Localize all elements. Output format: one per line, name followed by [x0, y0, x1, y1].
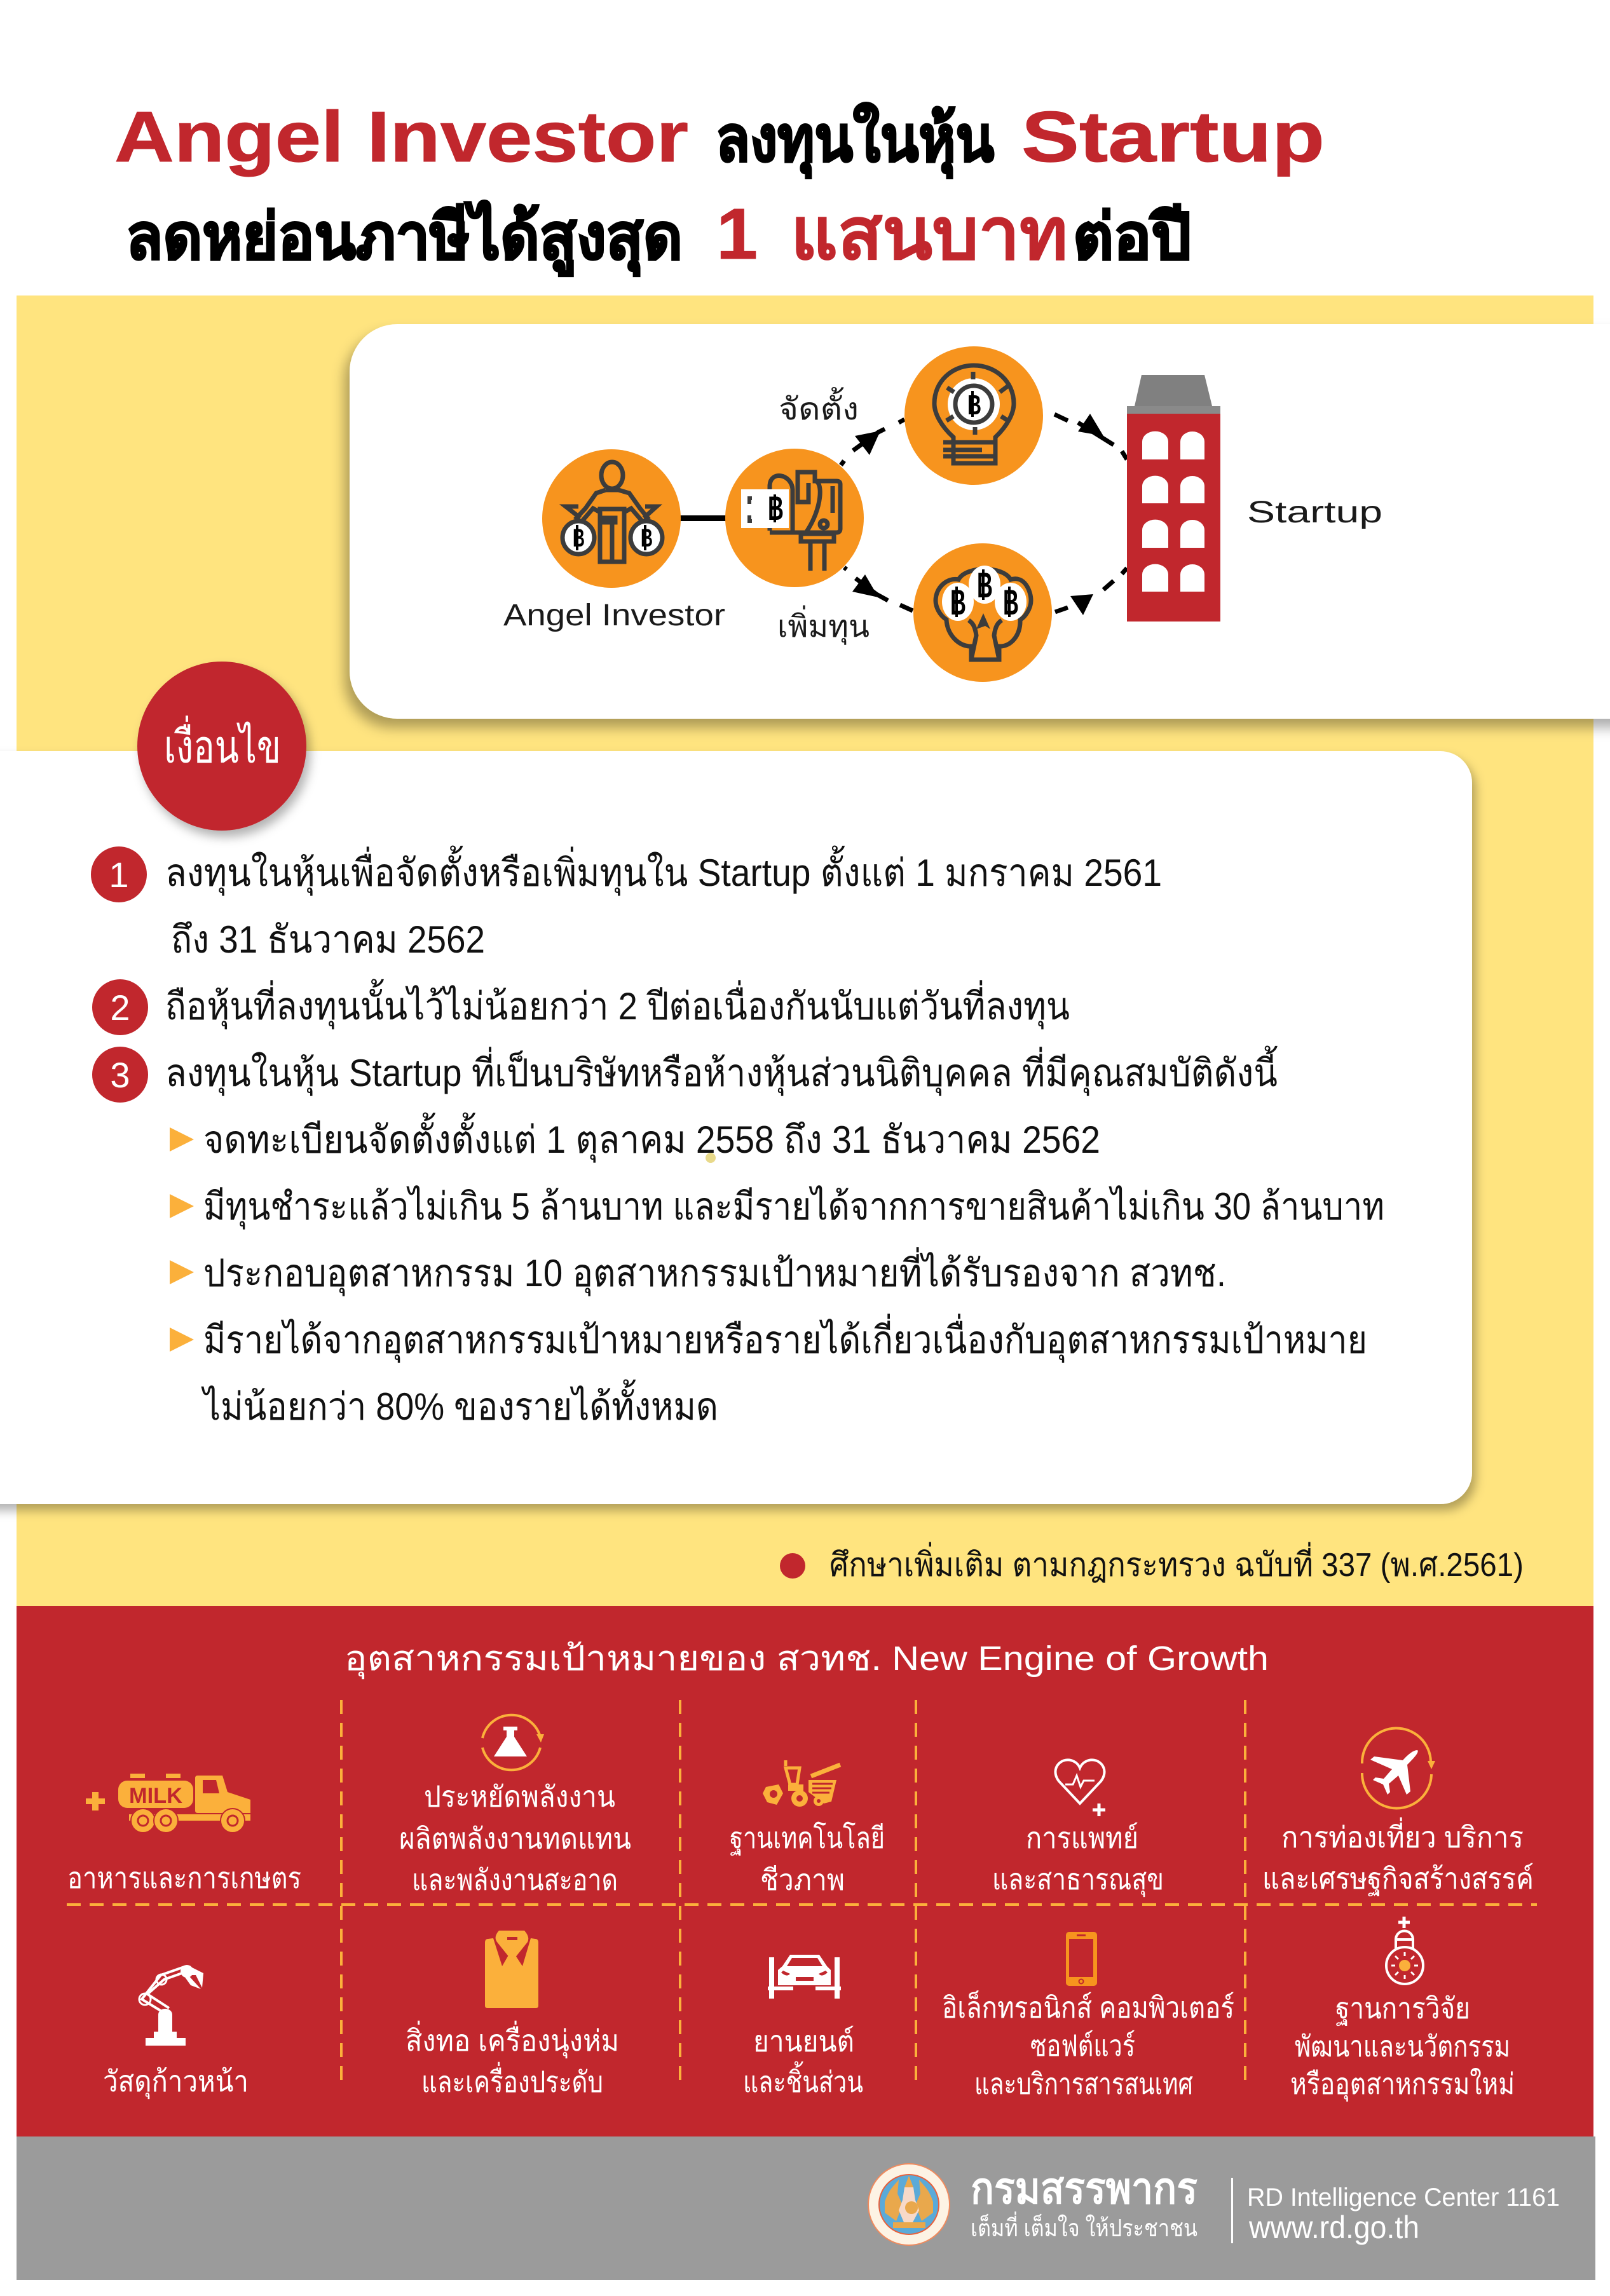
icon: milk truck: MILK: [129, 1784, 182, 1808]
icon: investor with coin bags: B: [641, 524, 653, 552]
icon: flask in ring: [482, 1715, 544, 1770]
diagram labels: Startup: [1247, 496, 1382, 529]
diagram labels: Angel Investor: [503, 599, 725, 632]
sub-condition bullets: ไม่น้อยกว่า 80% ของรายได้ทั้งหมด: [201, 1379, 718, 1428]
icon: harvester: [763, 1760, 840, 1807]
numbered conditions: ลงทุนในหุ้นเพื่อจัดตั้งหรือเพิ่มทุนใน Startup ตั้งแต่ 1 มกราคม 2561: [165, 845, 1162, 896]
title: Startup: [1021, 97, 1325, 177]
diagram labels: เพิ่มทุน: [777, 605, 870, 645]
title: Angel Investor: [114, 97, 688, 177]
icon: research bulb: [1386, 1917, 1423, 1984]
numbered conditions: [91, 845, 1278, 1103]
label: automotive: ยานยนต์: [753, 2025, 854, 2058]
footer: [17, 2136, 1595, 2280]
icon: startup building: [1127, 375, 1220, 622]
icon: shirt: [485, 1931, 538, 2008]
logo: revenue department seal: [868, 2164, 950, 2245]
icon: airplane in ring: [1362, 1728, 1435, 1809]
label: electronics: อิเล็กทรอนิกส์ คอมพิวเตอร์: [942, 1990, 1234, 2024]
label: tourism: [1262, 1817, 1534, 1896]
label: energy: และพลังงานสะอาด: [412, 1863, 618, 1896]
icon: money tree: B: [977, 565, 993, 605]
sub-condition bullets: มีทุนชำระแล้วไม่เกิน 5 ล้านบาท และมีรายได้จากการขายสินค้าไม่เกิน 30 ล้านบาท: [203, 1185, 1384, 1230]
title: แสนบาท: [791, 194, 1068, 274]
label: biotechnology: [730, 1821, 885, 1896]
icon: milk truck: [86, 1774, 250, 1833]
label: energy: [399, 1780, 631, 1896]
icon: investor with coin bags: [542, 449, 681, 588]
label: biotechnology: ชีวภาพ: [760, 1863, 845, 1896]
diagram labels: จัดตั้ง: [779, 387, 859, 426]
title: ลงทุนในหุ้น: [716, 102, 994, 179]
numbered conditions: 1: [109, 855, 129, 895]
sub-condition bullets: มีรายได้จากอุตสาหกรรมเป้าหมายหรือรายได้เกี่ยวเนื่องกับอุตสาหกรรมเป้าหมาย: [203, 1314, 1367, 1363]
diagram labels: [503, 387, 1382, 645]
label: energy: ผลิตพลังงานทดแทน: [399, 1822, 631, 1855]
panel: conditions card: [0, 751, 1472, 1504]
icon: camera with coin: B: [768, 490, 784, 527]
icon: camera with coin: [725, 449, 864, 587]
label: tourism: การท่องเที่ยว บริการ: [1281, 1817, 1524, 1854]
label: research: พัฒนาและนวัตกรรม: [1295, 2030, 1510, 2063]
heading badge: conditions: เงื่อนไข: [164, 716, 281, 773]
label: electronics: [942, 1990, 1234, 2100]
title: ต่อปี: [1073, 201, 1191, 273]
label: textiles: และเครื่องประดับ: [421, 2062, 603, 2098]
title: ลดหย่อนภาษีได้สูงสุด: [126, 201, 683, 276]
department name: กรมสรรพากร: [971, 2164, 1197, 2213]
sub-condition bullets: ประกอบอุตสาหกรรม 10 อุตสาหกรรมเป้าหมายที่ได้รับรองจาก สวทช.: [203, 1247, 1226, 1296]
numbered conditions: ถือหุ้นที่ลงทุนนั้นไว้ไม่น้อยกว่า 2 ปีต่อเนื่องกันนับแต่วันที่ลงทุน: [165, 979, 1070, 1029]
label: food and agriculture: อาหารและการเกษตร: [67, 1861, 301, 1894]
label: electronics: และบริการสารสนเทศ: [974, 2067, 1193, 2100]
dashed arrows: [841, 414, 1127, 615]
label: medical: การแพทย์: [1026, 1821, 1138, 1854]
label: biotechnology: ฐานเทคโนโลยี: [730, 1821, 885, 1856]
numbered conditions: 2: [110, 988, 130, 1028]
panel: target industries: [17, 1606, 1593, 2137]
section heading: อุตสาหกรรมเป้าหมายของ สวทช. New Engine of Growth: [345, 1640, 1269, 1680]
label: medical: และสาธารณสุข: [992, 1863, 1164, 1898]
numbered conditions: 3: [110, 1055, 130, 1095]
title: [114, 97, 1325, 276]
department name: เต็มที่ เต็มใจ ให้ประชาชน: [971, 2211, 1197, 2242]
contact details: www.rd.go.th: [1248, 2210, 1419, 2245]
title: 1: [716, 194, 758, 274]
icon: car on lift: [768, 1955, 841, 1999]
label: tourism: และเศรษฐกิจสร้างสรรค์: [1262, 1862, 1534, 1896]
footnote: ศึกษาเพิ่มเติม ตามกฎกระทรวง ฉบับที่ 337 (พ.ศ.2561): [829, 1542, 1524, 1584]
label: advanced materials: วัสดุก้าวหน้า: [103, 2065, 249, 2100]
yellow background panel: [17, 295, 1593, 1608]
sub-condition bullets: จดทะเบียนจัดตั้งตั้งแต่ 1 ตุลาคม 2558 ถึง 31 ธันวาคม 2562: [203, 1112, 1100, 1163]
label: research: ฐานการวิจัย: [1335, 1992, 1470, 2026]
heading badge: conditions: [137, 662, 306, 831]
panel: investment flow diagram: [350, 324, 1610, 719]
label: medical: [992, 1821, 1164, 1898]
department name: [971, 2164, 1197, 2242]
contact details: [1247, 2184, 1560, 2245]
connector line: [680, 515, 727, 521]
label: energy: ประหยัดพลังงาน: [424, 1780, 615, 1813]
label: textiles: สิ่งทอ เครื่องนุ่งห่ม: [406, 2020, 619, 2059]
icon: heart with pulse: [1055, 1760, 1105, 1816]
label: automotive: [743, 2025, 863, 2098]
icon: light bulb with coin: B: [967, 390, 981, 421]
icon: smartphone: [1066, 1932, 1097, 1986]
icon: money tree: B: [1003, 582, 1019, 622]
icon: light bulb with coin: [904, 346, 1043, 485]
numbered conditions: ลงทุนในหุ้น Startup ที่เป็นบริษัทหรือห้างหุ้นส่วนนิติบุคคล ที่มีคุณสมบัติดังนี้: [165, 1045, 1278, 1096]
label: electronics: ซอฟต์แวร์: [1030, 2029, 1135, 2062]
icon: money tree: B: [950, 582, 966, 622]
icon: investor with coin bags: B: [573, 524, 585, 552]
icon: robot arm: [139, 1965, 203, 2046]
label: automotive: และชิ้นส่วน: [743, 2061, 863, 2098]
numbered conditions: ถึง 31 ธันวาคม 2562: [171, 918, 485, 961]
label: textiles: [406, 2020, 619, 2098]
label: research: หรืออุตสาหกรรมใหม่: [1290, 2067, 1515, 2102]
sub-condition bullets: [170, 1112, 1384, 1428]
icon: money tree: [913, 543, 1052, 682]
contact details: RD Intelligence Center 1161: [1247, 2184, 1560, 2211]
label: research: [1290, 1992, 1515, 2102]
